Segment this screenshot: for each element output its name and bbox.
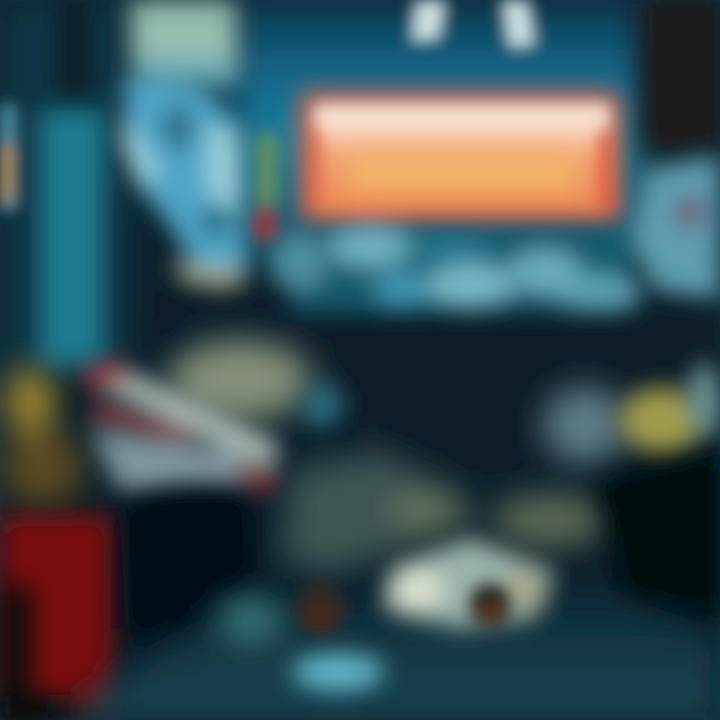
floor [55,590,720,720]
left edge screen [0,105,16,210]
left column [40,110,104,365]
shelf items below screen [270,226,642,316]
right side clutter [543,364,720,615]
white papers [385,538,555,628]
back wall [0,0,645,370]
beige cushion [168,340,312,420]
lower left shadow [0,695,70,720]
television screen [300,92,620,224]
dark corner top right [640,0,720,150]
cyan floor reflection [292,654,384,690]
colored stripe next to head [254,135,278,240]
coffee cups [295,582,512,634]
figure: pale head [122,0,248,288]
black armrest [120,485,255,640]
dark vertical strip [60,0,88,100]
blue spot beside cushion [302,383,342,427]
white lights above the screen [410,0,536,48]
dark sofa [140,318,720,480]
right side pale blue object [630,155,720,300]
left yellow and olive items [0,368,84,506]
striped red and white blanket [78,360,280,495]
table clutter [218,450,608,642]
red chair [0,515,112,720]
